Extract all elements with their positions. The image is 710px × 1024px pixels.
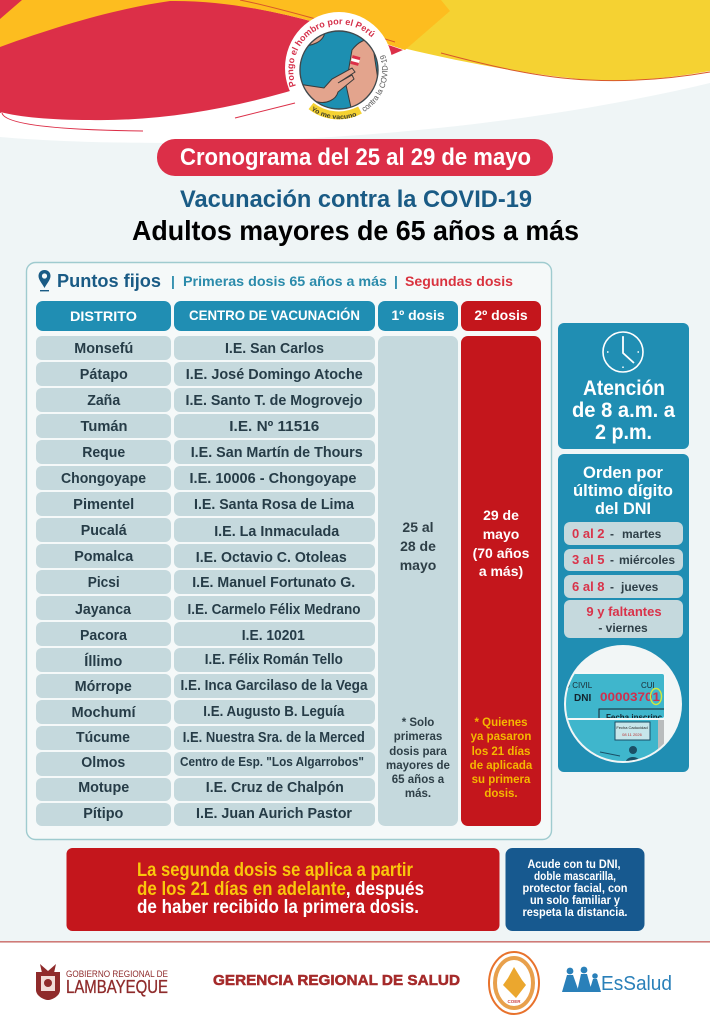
legend: primeras dosis: Primeras dosis 65 años a más [183, 273, 387, 289]
callout: segunda dosis: La segunda dosis se aplica a partir [137, 860, 414, 881]
row: Pucalá: Pucalá [81, 523, 128, 539]
column: 1 dosis: más. [405, 788, 431, 800]
legend: segundas dosis: Segundas dosis [405, 273, 513, 289]
row: Reque: Reque [82, 445, 125, 461]
illustration: DNI card: Fecha inscripc [606, 713, 663, 722]
illustration: DNI card: 08 11 2026 [622, 732, 643, 737]
column: 2 dosis: dosis. [484, 788, 518, 800]
row: Zaña: I.E. Santo T. de Mogrovejo [186, 393, 363, 409]
column header: 1 dosis [378, 301, 458, 331]
row: Chongoyape: Chongoyape [61, 471, 146, 487]
row: Monsefú: Monsefú [74, 341, 133, 357]
row: Zaña [36, 388, 375, 412]
row: Motupe: Motupe [78, 780, 129, 796]
legend: primeras dosis: | [171, 273, 175, 289]
row: Pátapo: I.E. José Domingo Atoche [186, 367, 363, 383]
callout: requisitos: Acude con tu DNI, [528, 857, 620, 871]
column: 1 dosis: primeras [394, 731, 442, 743]
column header: distrito [36, 301, 171, 331]
row: Jayanca: I.E. Carmelo Félix Medrano [188, 602, 361, 618]
schedule: miércoles: - [610, 553, 614, 567]
logo: COER seal [489, 952, 539, 1014]
row: Tumán: I.E. Nº 11516 [229, 419, 319, 435]
row: Olmos [36, 752, 375, 776]
column header: 1 dosis: 1º dosis [391, 307, 445, 323]
column: 2 dosis: mayo [483, 526, 519, 542]
panel: atención [558, 323, 689, 449]
campaign logo [285, 12, 392, 120]
row: Íllimo: Íllimo [84, 653, 122, 670]
header swoosh graphic [0, 0, 710, 131]
column: 2 dosis [461, 336, 541, 826]
row: Pítipo: Pítipo [83, 806, 123, 822]
callout: segunda dosis [66, 848, 500, 931]
title pill [157, 139, 553, 176]
row: Tumán: Tumán [80, 419, 128, 435]
row: Mochumí [36, 700, 375, 724]
callout: requisitos: respeta la distancia. [522, 905, 628, 919]
row: Mórrope: Mórrope [75, 679, 132, 695]
panel heading: Puntos fijos [57, 271, 161, 291]
row: Olmos: Olmos [81, 755, 125, 771]
logo: EsSalud: EsSalud [601, 973, 672, 995]
row: Pomalca [36, 544, 375, 568]
logo: EsSalud [562, 967, 672, 995]
schedule: jueves: 6 al 8 [572, 579, 605, 594]
column: 2 dosis: 29 de [483, 507, 519, 523]
row: Pacora: Pacora [80, 628, 128, 644]
column: 1 dosis [378, 336, 458, 826]
title pill: Cronograma del 25 al 29 de mayo [180, 144, 531, 171]
illustration: DNI card: J CIVIL [566, 681, 593, 690]
callout: requisitos [506, 848, 644, 931]
column: 2 dosis: (70 años [473, 545, 530, 561]
row: Pátapo: Pátapo [80, 367, 128, 383]
schedule: martes [564, 522, 683, 545]
logo: Gerencia Regional de Salud: GERENCIA REGIONAL DE SALUD [213, 973, 460, 989]
row: Pimentel [36, 492, 375, 516]
row: Pomalca: Pomalca [74, 549, 134, 565]
row: Chongoyape [36, 466, 375, 490]
panel: orden por DNI: último dígito [573, 481, 673, 500]
column: 1 dosis: 28 de [400, 538, 436, 554]
row: Túcume: Túcume [76, 730, 130, 746]
schedule: viernes [564, 600, 683, 638]
column: 2 dosis: de aplicada [470, 760, 533, 772]
schedule: jueves: jueves [620, 580, 659, 594]
icon: location pin [38, 270, 50, 291]
campaign logo: Yo me vacuno [312, 106, 356, 120]
column: 1 dosis: 25 al [402, 519, 434, 535]
column: 1 dosis: 65 años a [392, 774, 445, 786]
row: Motupe: I.E. Cruz de Chalpón [206, 780, 344, 796]
row: Chongoyape: I.E. 10006 - Chongoyape [190, 471, 356, 487]
illustration: DNI card: 00003701 [600, 690, 660, 704]
legend: segundas dosis: | [394, 273, 398, 289]
illustration: DNI card: Fecha Caducidad [616, 725, 648, 730]
schedule: miércoles: miércoles [619, 553, 675, 567]
row: Picsi: I.E. Manuel Fortunato G. [192, 575, 355, 591]
schedule: viernes: 9 y faltantes [586, 604, 662, 619]
schedule: viernes: - viernes [598, 621, 648, 635]
row: Pítipo [36, 803, 375, 826]
panel: orden por DNI [558, 454, 689, 772]
logo: Gobierno Regional de Lambayeque: LAMBAYEQUE [66, 977, 168, 997]
illustration: DNI card: DNI [574, 693, 591, 704]
row: Pátapo [36, 362, 375, 386]
illustration: DNI card: CUI [641, 681, 655, 690]
schedule: jueves [564, 575, 683, 598]
column: 2 dosis: * Quienes [474, 717, 528, 729]
column: 2 dosis: ya pasaron [471, 731, 531, 743]
column: 1 dosis: * Solo [402, 717, 434, 729]
row: Zaña: Zaña [87, 393, 121, 409]
icon: clock [603, 332, 643, 372]
row: Pucalá [36, 518, 375, 542]
panel: puntos fijos [26, 262, 552, 840]
column: 1 dosis: mayores de [386, 760, 450, 772]
schedule: miércoles [564, 549, 683, 571]
row: Monsefú: I.E. San Carlos [225, 341, 324, 357]
panel: orden por DNI: Orden por [583, 463, 663, 482]
row: Pacora: I.E. 10201 [242, 628, 305, 644]
illustration: DNI card [560, 645, 686, 765]
panel: atención: 2 p.m. [595, 421, 652, 444]
row: Pucalá: I.E. La Inmaculada [214, 524, 340, 540]
row: Picsi [36, 570, 375, 594]
callout: requisitos: un solo familiar y [530, 893, 620, 907]
row: Mórrope: I.E. Inca Garcilaso de la Vega [180, 678, 368, 694]
callout: requisitos: protector facial, con [522, 881, 628, 895]
panel: atención: Atención [583, 377, 665, 400]
row: Reque [36, 440, 375, 464]
row: Pimentel: Pimentel [73, 497, 134, 513]
row: Mórrope [36, 674, 375, 698]
schedule: jueves: - [610, 580, 614, 594]
logo: Gobierno Regional de Lambayeque [36, 964, 168, 1000]
schedule: martes: 0 al 2 [572, 526, 605, 541]
row: Monsefú [36, 336, 375, 360]
callout: segunda dosis: de haber recibido la primera dosis. [137, 897, 419, 918]
schedule: martes: - [610, 527, 614, 541]
panel: orden por DNI: del DNI [595, 499, 651, 518]
row: Mochumí: Mochumí [72, 705, 136, 721]
row: Mochumí: I.E. Augusto B. Leguía [203, 704, 345, 720]
logo: COER seal: COER [507, 999, 521, 1004]
row: Picsi: Picsi [88, 575, 120, 591]
row: Motupe [36, 778, 375, 801]
column header: 2 dosis: 2º dosis [474, 307, 528, 323]
column: 1 dosis: mayo [400, 557, 436, 573]
callout: requisitos: doble mascarilla, [534, 869, 616, 883]
row: Pacora [36, 622, 375, 646]
column: 1 dosis: dosis para [389, 746, 447, 758]
row: Túcume [36, 726, 375, 750]
row: Tumán [36, 414, 375, 438]
column header: centro [174, 301, 375, 331]
logo: Gobierno Regional de Lambayeque: GOBIERNO REGIONAL DE [66, 969, 168, 980]
row: Túcume: I.E. Nuestra Sra. de la Merced [183, 730, 365, 746]
row: Pítipo: I.E. Juan Aurich Pastor [196, 806, 352, 822]
row: Jayanca [36, 596, 375, 620]
row: Reque: I.E. San Martín de Thours [191, 445, 363, 461]
schedule: martes: martes [622, 527, 662, 541]
column: 2 dosis: su primera [472, 774, 531, 786]
row: Pimentel: I.E. Santa Rosa de Lima [194, 497, 355, 513]
row: Íllimo [36, 648, 375, 672]
schedule: miércoles: 3 al 5 [572, 552, 605, 567]
panel: atención: de 8 a.m. a [572, 399, 675, 422]
table rows [36, 336, 375, 826]
row: Pomalca: I.E. Octavio C. Otoleas [196, 550, 347, 566]
campaign logo: contra la COVID-19 [362, 55, 388, 112]
row: Íllimo: I.E. Félix Román Tello [205, 652, 343, 668]
row: Jayanca: Jayanca [75, 602, 132, 618]
callout: segunda dosis: de los 21 días en adelante, después [137, 879, 424, 900]
column: 2 dosis: los 21 días [472, 746, 530, 758]
column: 2 dosis: a más) [479, 563, 523, 579]
campaign logo: Pongo el hombro por el Perú [288, 19, 376, 88]
row: Olmos: Centro de Esp. "Los Algarrobos" [180, 754, 364, 769]
heading: Adultos mayores de 65 años a más [132, 215, 579, 246]
subtitle: Vacunación contra la COVID-19 [180, 186, 532, 213]
column header: distrito: DISTRITO [70, 308, 137, 324]
column header: centro: CENTRO DE VACUNACIÓN [189, 306, 360, 323]
column header: 2 dosis [461, 301, 541, 331]
